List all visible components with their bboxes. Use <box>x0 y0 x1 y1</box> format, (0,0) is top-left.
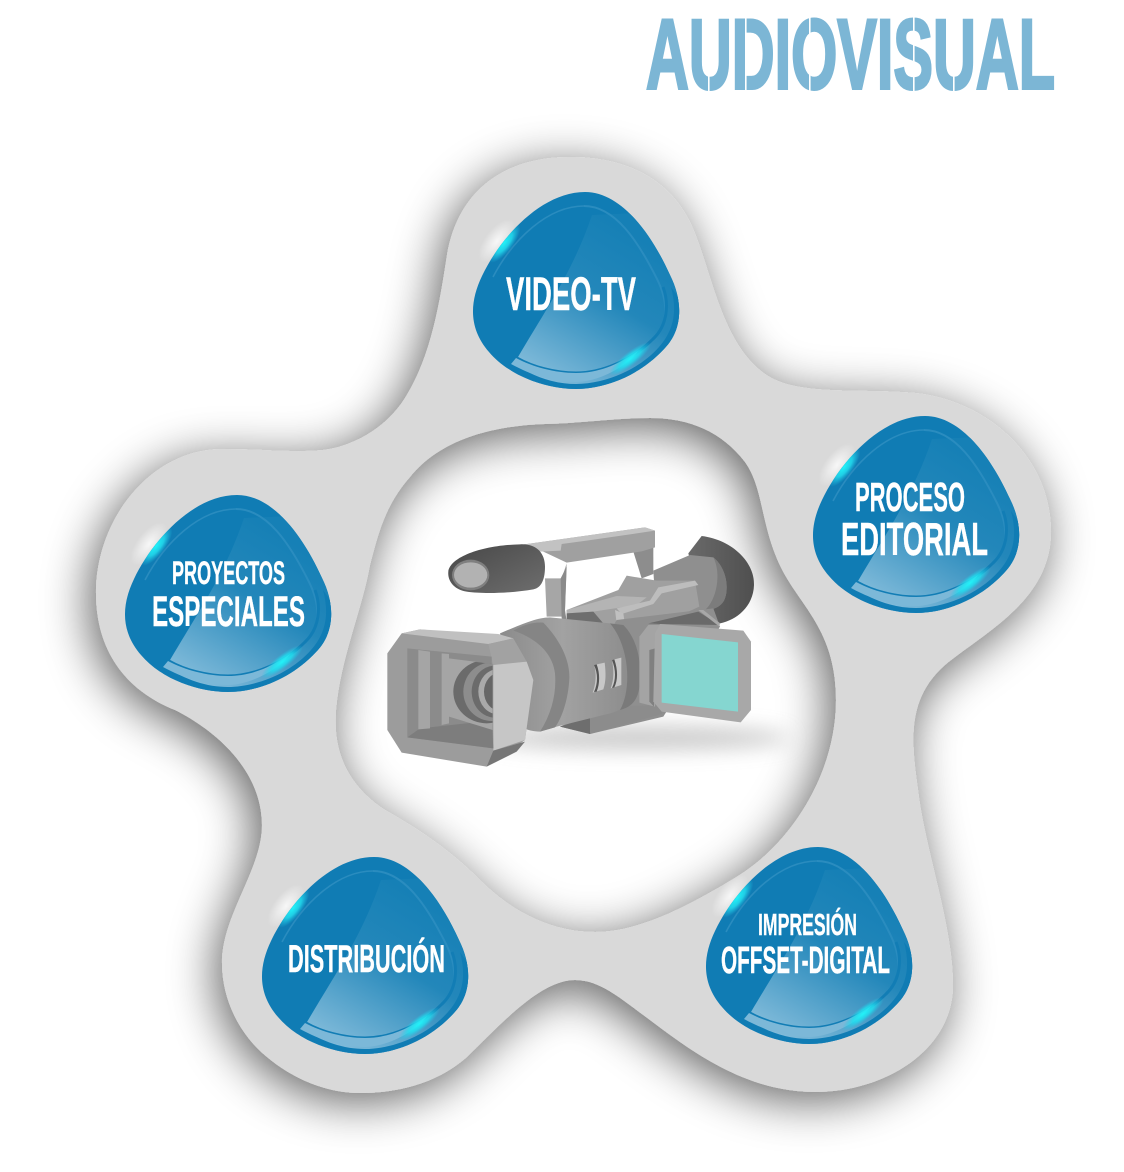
flip-out LCD screen <box>653 624 751 722</box>
node: Proceso Editorial <box>812 416 1028 620</box>
viewfinder tube <box>653 555 727 623</box>
node: Distribución: DISTRIBUCIÓN <box>288 937 445 981</box>
node: Video-TV: VIDEO-TV <box>506 267 636 320</box>
handle <box>633 547 653 578</box>
barrel <box>500 617 638 732</box>
lens glass <box>449 658 493 730</box>
panel: grey five-lobed blob <box>96 157 1051 1093</box>
camera shadow <box>490 726 790 750</box>
node: Proyectos Especiales <box>124 495 340 699</box>
node: Impresión Offset-Digital <box>705 847 921 1051</box>
lens hood <box>387 629 533 767</box>
icon: video camera <box>387 527 754 767</box>
node: Impresión Offset-Digital: OFFSET-DIGITAL <box>721 940 890 982</box>
eyepiece <box>688 536 754 623</box>
top housing <box>567 576 699 627</box>
rear panel <box>648 612 719 625</box>
node: Proyectos Especiales: PROYECTOS <box>172 555 285 591</box>
node: Impresión Offset-Digital: IMPRESIÓN <box>758 906 857 942</box>
node: Video-TV <box>472 192 688 396</box>
rear body <box>583 608 720 734</box>
node: Proyectos Especiales: ESPECIALES <box>152 588 305 636</box>
node: Distribución <box>261 857 477 1061</box>
node: Proceso Editorial: EDITORIAL <box>841 513 988 565</box>
barrel switches <box>593 663 606 693</box>
lower grip <box>560 705 662 734</box>
microphone <box>448 544 545 593</box>
node: Proceso Editorial: PROCESO <box>855 474 965 520</box>
